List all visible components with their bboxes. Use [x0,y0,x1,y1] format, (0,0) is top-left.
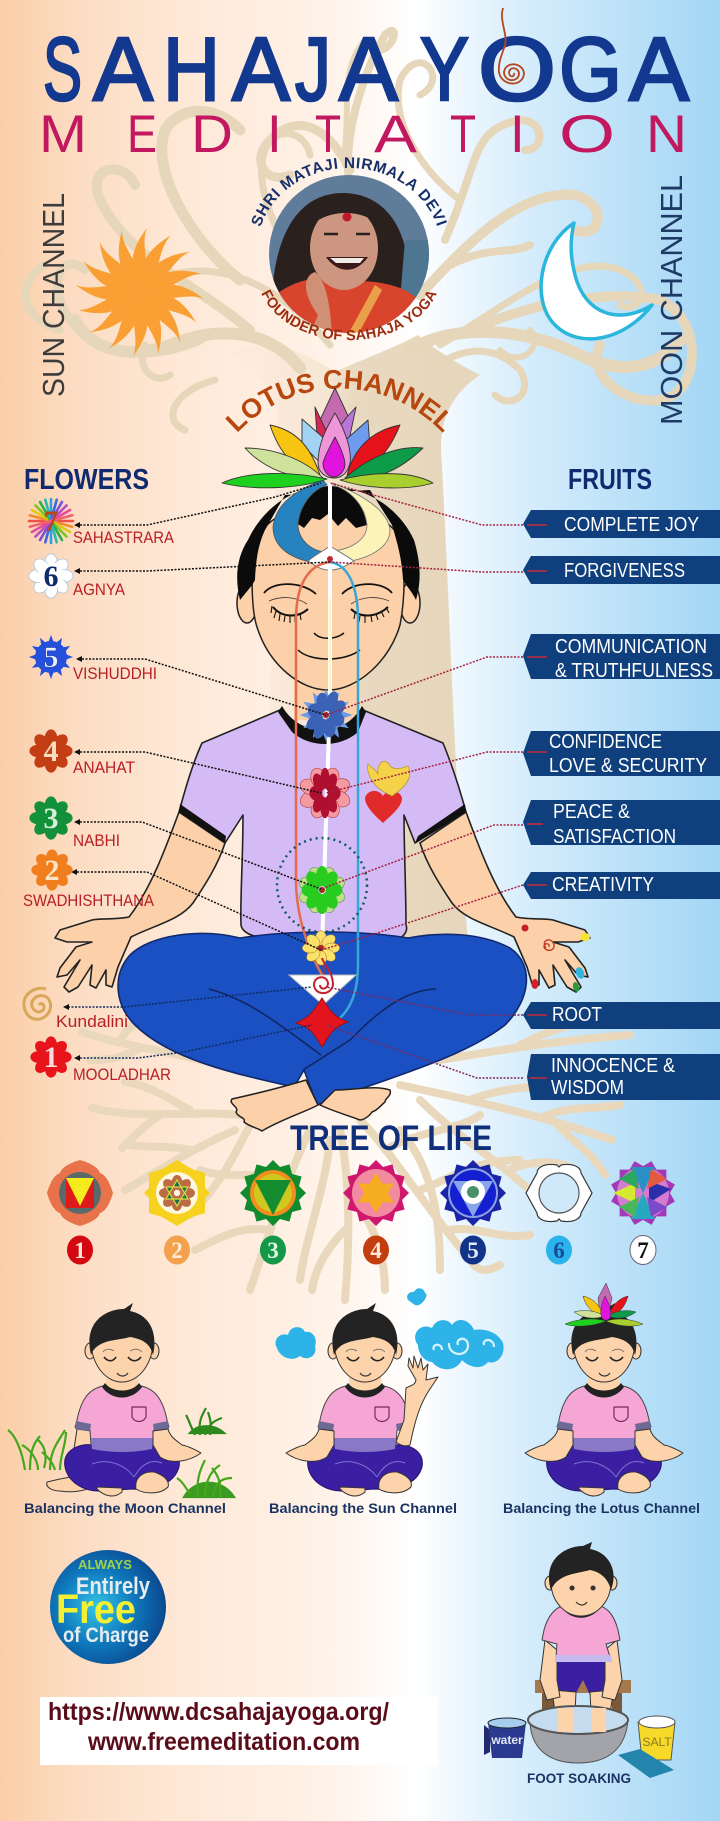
moon channel line [330,562,358,1022]
chakra numbers [67,1236,656,1264]
head [545,1576,555,1590]
boy: balancing lotus channel [525,1283,683,1496]
balancing captions: Balancing the Sun Channel [269,1500,457,1516]
collar [278,706,366,744]
tree of life crown and trunk [26,31,692,960]
title line: Meditation: O [559,105,615,164]
flower 3 nabhi: 3 [44,802,58,835]
chakra symbol 5 [439,1159,507,1227]
website links: www.freemeditation.com [87,1728,360,1756]
sun boy figure [286,1303,422,1496]
chakra symbol 3 [239,1159,307,1227]
swirl cloud [415,1320,504,1369]
fruit: communication and truthfulness [523,634,720,682]
title line: Sahaja Yoga: J [295,20,331,120]
nabhi dotted circle [277,838,367,932]
central channel [322,485,330,950]
heart with flame [365,761,410,823]
text: Founder of Sahaja Yoga arc: FOUNDER OF SAHAJA YOGA [262,289,437,340]
left connector lines [68,483,330,1058]
central channel lower [322,950,324,975]
chakra numbers: 3 [267,1238,279,1263]
small clouds [275,1288,426,1359]
title line: Meditation: M [39,105,87,164]
balancing captions [24,1500,700,1516]
lotus boy figure [525,1303,683,1496]
grass tufts [8,1408,234,1497]
third eye dot [327,556,333,562]
flower labels: AGNYA [73,580,126,599]
small lotus [565,1283,643,1326]
icon: crescent moon [541,223,652,339]
title line: Meditation: E [127,105,157,164]
title line: Sahaja Yoga: A [339,20,398,120]
nabhi flower [291,859,353,921]
kundalini triangle [289,975,356,1005]
sun channel label: SUN CHANNEL [36,193,71,397]
balancing captions: Balancing the Lotus Channel [503,1500,700,1516]
foot soaking scene [484,1542,675,1778]
text: Lotus Channel arc: LOTUS CHANNEL [225,370,448,433]
badge: always entirely free of charge: of Charge [63,1624,149,1647]
foot soaking caption: FOOT SOAKING [527,1770,631,1786]
title line: Sahaja Yoga: G [559,20,622,120]
heading: fruits: FRUITS [568,464,652,496]
palm markings [522,924,590,993]
flower labels: SWADHISHTHANA [23,891,155,910]
balancing captions: Balancing the Moon Channel [24,1500,226,1516]
flower 5 vishuddhi: 5 [44,641,58,674]
chakra symbol 1 [47,1160,113,1226]
website links [40,1697,438,1765]
flower labels: ANAHAT [73,758,135,777]
right connector lines [321,483,523,1078]
fruit: innocence and wisdom: INNOCENCE & [551,1055,676,1077]
face features [572,1586,593,1590]
fruit: confidence love and security [523,731,720,777]
legs [118,932,526,1105]
chakra symbol 4 [342,1159,410,1227]
icon: kundalini spiral in O [499,8,524,84]
flower 2 swadhishthana [31,849,73,891]
fruit: root [523,1002,720,1029]
title [39,8,689,164]
face [252,502,404,690]
anahat flower [291,759,359,827]
boy: balancing sun channel [275,1288,504,1496]
icon: kundalini coil [24,988,51,1019]
fruit: forgiveness: FORGIVENESS [564,560,685,582]
shirt [179,710,466,938]
flower 6 agnya [29,554,73,598]
flower 4 anahat [29,729,73,773]
flower labels: MOOLADHAR [73,1065,171,1084]
badge: always entirely free of charge: ALWAYS [78,1557,132,1572]
title line: Sahaja Yoga: A [232,20,290,120]
closed eyes [273,607,388,616]
right foot [320,1088,390,1120]
basin [530,1720,628,1763]
shorts [553,1655,614,1695]
heading: flowers: FLOWERS [24,464,149,496]
badge: always entirely free of charge: Free [56,1586,136,1632]
neck [294,660,358,720]
badge: always entirely free of charge [50,1550,166,1664]
fruit: peace and satisfaction: PEACE & [553,801,631,823]
flower 4 anahat: 4 [44,735,58,768]
face yellow tone [328,600,332,690]
icon: sun [76,228,204,356]
water cup: water [490,1733,523,1747]
chakra numbers: 2 [171,1238,183,1263]
fruit: confidence love and security: CONFIDENCE [549,731,662,753]
text: Shri Mataji Nirmala Devi arc: SHRI MATAJI NIRMALA DEVI [252,157,447,226]
flower labels: SAHASTRARA [73,528,175,547]
flower labels: Kundalini [56,1012,128,1031]
swadhishthana flower [302,931,340,965]
energy channels [296,485,358,1022]
raised arm [396,1356,438,1446]
cream crescent [331,483,390,563]
chakra numbers: 4 [370,1238,382,1263]
title line: Sahaja Yoga [43,20,689,120]
flower 1 mooladhar [30,1036,72,1078]
right arm and hand [420,812,590,992]
feet in water [558,1708,606,1732]
flower 3 nabhi [29,796,73,840]
fruit: complete joy [523,510,720,538]
left arm and hand [55,812,225,992]
moon channel label: MOON CHANNEL [654,175,689,425]
leg creases [209,989,436,1070]
title line: Meditation: D [191,105,233,164]
boy: balancing moon channel [8,1303,234,1497]
moon boy figure [47,1303,201,1496]
flower labels [23,528,175,1084]
title line: Sahaja Yoga: A [629,20,689,120]
fruit: complete joy: COMPLETE JOY [564,514,699,536]
hair [237,487,420,600]
title line: Meditation: N [646,105,687,164]
fruit: creativity [523,872,720,899]
chakra flowers on body [222,388,433,1047]
salt bucket: SALT [642,1735,672,1749]
fruit: peace and satisfaction [523,800,720,848]
chakra numbers: 5 [467,1238,479,1263]
eyebrows [264,584,392,594]
shins [552,1690,614,1735]
left connector arrowheads [63,522,82,1061]
belt [555,1655,612,1662]
flower 2 swadhishthana: 2 [44,854,60,887]
sahastrara lotus [222,388,433,488]
nose and mouth [298,633,360,659]
title line: Sahaja Yoga: H [163,20,220,120]
title line: Sahaja Yoga: A [93,20,153,120]
fruit: root: ROOT [552,1004,602,1026]
flower 6 agnya: 6 [44,560,58,593]
towel [618,1749,674,1778]
portrait: Shri Mataji [269,175,429,333]
chakra numbers: 7 [637,1238,649,1263]
title line: Meditation: A [374,105,418,164]
chakra symbol 6 [526,1164,592,1222]
title line: Sahaja Yoga: S [43,20,82,120]
badge: always entirely free of charge: Entirely [76,1573,151,1600]
flower 1 mooladhar: 1 [44,1041,58,1074]
flower labels: NABHI [73,831,120,850]
stool [535,1680,631,1721]
water cup [484,1718,526,1758]
fruit: creativity: CREATIVITY [552,874,654,896]
hair [549,1542,614,1590]
salt bucket [638,1716,675,1760]
title line: Meditation: T [315,105,341,164]
shirt [542,1605,620,1657]
blue crescent [273,480,328,563]
chakra symbol 7 [602,1152,684,1234]
title line: Sahaja Yoga: O [478,20,556,120]
website links: https://www.dcsahajayoga.org/ [48,1698,389,1726]
title line: Meditation: I [267,105,282,164]
title line: Meditation: T [450,105,476,164]
fruit: innocence and wisdom: WISDOM [551,1077,624,1099]
soaking boy arms [540,1640,622,1700]
title line: Sahaja Yoga: Y [420,20,469,120]
third eye wings [308,546,354,570]
chakra numbers: 6 [553,1238,565,1263]
fruit: forgiveness [523,556,720,584]
neck collar [566,1600,596,1616]
title line: Meditation [39,105,687,164]
title line: Meditation: I [510,105,525,164]
heading: tree of life: TREE OF LIFE [290,1119,492,1158]
chakra numbers: 1 [74,1238,86,1263]
central black hair [298,486,367,528]
flower 5 vishuddhi [29,635,73,679]
sun channel line [296,562,330,975]
flower 7 sahastrara [29,499,73,543]
kundalini spiral [314,958,333,993]
mooladhar flower [296,998,348,1047]
ears [237,583,257,623]
chakra symbol 2 [144,1160,210,1226]
shirt sleeves trim [179,804,466,843]
vishuddhi flower [299,684,353,746]
meditating figure [55,480,590,1131]
flower labels: VISHUDDHI [73,664,157,683]
fruit: peace and satisfaction: SATISFACTION [553,826,676,848]
fruit: innocence and wisdom [527,1054,720,1100]
left foot [231,1080,318,1131]
tree of life roots [82,1020,630,1300]
flower 7 sahastrara: 7 [44,505,58,538]
